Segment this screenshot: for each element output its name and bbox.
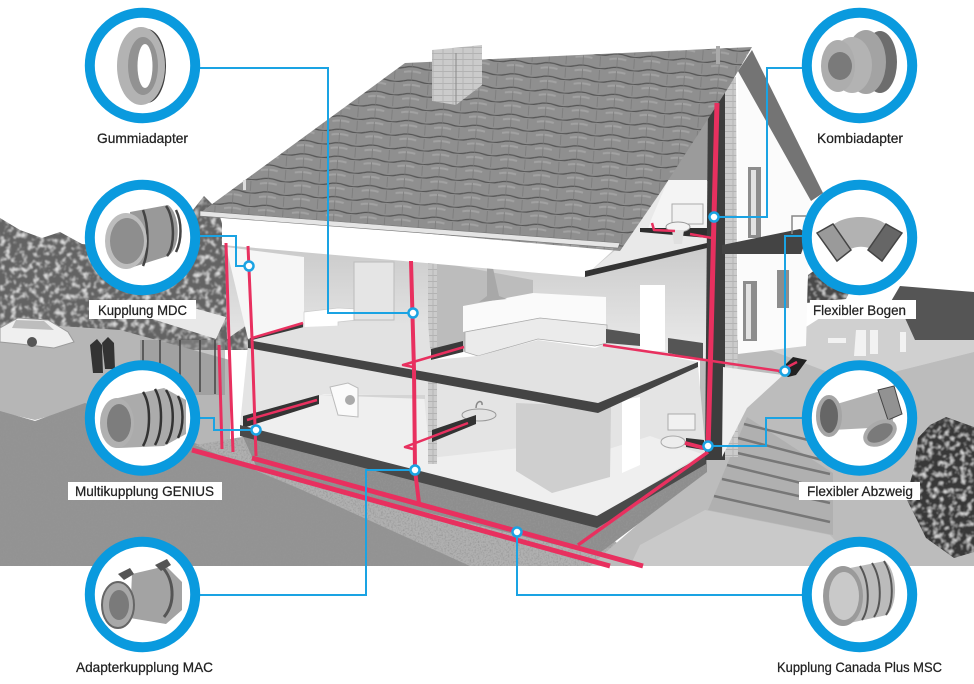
icon: flexible bend [817,217,902,261]
darker wall upper [437,262,533,352]
icon: GENIUS coupling [100,388,186,448]
label: Adapterkupplung MAC [76,659,213,675]
stairs [708,417,833,535]
door upper [640,285,665,351]
floor branches [685,443,708,449]
middle stack [411,261,419,503]
connector lines [200,68,802,595]
shower box [516,403,611,493]
far lawn [770,319,974,372]
upper toilet [666,204,703,244]
upper storey back wall [225,241,707,359]
kitchen [463,268,607,356]
icon: flexible branch [818,386,902,450]
grass left [0,403,480,566]
main roof [200,47,752,251]
washer [330,383,358,417]
fridge [354,262,394,320]
brick column upper [428,262,437,352]
door lower [622,397,640,473]
gravel strip [195,433,645,566]
dark wall section [705,85,725,460]
patio drain recess [778,357,807,377]
gutter [200,211,620,248]
background landscape [0,196,974,566]
lower floor [240,394,702,517]
label box [68,482,222,500]
ground pipes [252,458,643,566]
yard left [0,326,230,450]
icon: MDC coupling [105,205,180,269]
left white panel [226,247,304,339]
carport [140,308,226,395]
bathroom wall [647,180,707,232]
callout: Kombiadapter [807,13,912,146]
diagonal to ground [578,452,708,545]
connector nodes [244,212,790,536]
icon: Canada Plus coupling [823,561,895,626]
pipe dark recesses lower [243,395,704,450]
label: Flexibler Abzweig [807,483,913,499]
window glass [746,170,756,339]
paving [630,510,836,566]
gable wall [738,70,810,354]
windows [743,167,789,341]
right terrain [590,320,974,566]
upper floor [248,322,698,403]
chimney [432,45,482,105]
roof vent [243,180,246,190]
label: Kupplung MDC [98,302,187,318]
attic slab edge [585,243,707,277]
icon: rubber adapter [117,27,166,105]
icon: combi adapter [821,30,897,94]
callout: Kupplung Canada Plus MSC [777,542,942,675]
label box [799,482,920,500]
icon: MAC adapter [102,559,182,628]
fascia band [222,218,620,277]
right barge board [738,50,823,201]
sink [462,402,496,421]
trees left [0,196,250,350]
label: Gummiadapter [97,130,188,146]
callout: Flexibler Bogen [807,185,916,319]
label: Kombiadapter [817,130,903,146]
right stack [708,103,717,450]
callout: Gummiadapter [90,13,195,146]
patio figures [828,330,906,356]
lower storey walls [240,345,706,517]
callout: Multikupplung GENIUS [68,365,222,500]
lower right wall [722,367,783,457]
people [90,337,115,373]
foundation [240,430,707,555]
tree right [906,417,974,558]
drainage pipes [192,103,797,566]
callout: Flexibler Abzweig [799,365,920,500]
wall washer room [320,395,425,399]
left stacks [226,243,233,452]
balcony [722,216,808,254]
room cabinet [304,308,376,336]
callout: Adapterkupplung MAC [76,542,213,675]
stack vent [716,46,720,64]
label: Kupplung Canada Plus MSC [777,659,942,675]
upper recess left [250,324,463,360]
brick column lower [428,378,437,464]
washer and room pipes [247,400,317,420]
bath dark recess [640,228,708,238]
lower toilet [661,414,695,448]
far field right [892,286,974,340]
house [200,45,823,555]
tree behind gable [807,272,848,303]
callout: Kupplung MDC [89,185,196,319]
upper slab edge [248,340,698,413]
car [0,318,74,348]
lower slab edge [240,425,706,528]
right brick strip [725,77,738,457]
label: Multikupplung GENIUS [75,483,214,499]
label: Flexibler Bogen [813,302,906,318]
label box [89,300,196,319]
middle branches [403,347,468,449]
right upper room [585,104,707,276]
sloped ceiling [640,105,708,213]
upper recess [606,329,703,360]
label box [810,300,916,319]
